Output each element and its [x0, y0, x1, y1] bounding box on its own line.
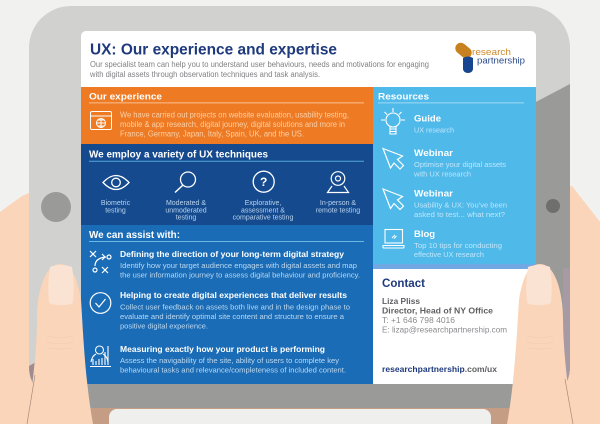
- experience text: mobile & app research, digital journey, digital solutions and more in: [120, 120, 345, 129]
- panel: assist: [81, 225, 373, 384]
- technique labels: testing: [105, 208, 126, 214]
- contact details: T: +1 646 798 4016: [382, 316, 456, 325]
- icon: question: ?: [260, 175, 267, 189]
- resource: webinar 2: Usability & UX: You’ve been: [414, 200, 507, 210]
- item: digital experiences: [120, 290, 350, 330]
- resource: blog: Top 10 tips for conducting: [414, 241, 502, 250]
- resource: webinar 1: Webinar: [414, 148, 454, 158]
- intro text: Our specialist team can help you to understand user behaviours, needs and motivations for engaging: [90, 60, 429, 69]
- icon: measuring: [90, 346, 111, 366]
- technique labels: Biometric: [101, 200, 131, 207]
- resource: webinar 2: asked to test... what next?: [414, 210, 505, 219]
- left palm: [0, 188, 40, 424]
- contact details: Liza Pliss: [382, 297, 421, 306]
- resource: webinar 1: Optimise your digital assets: [414, 160, 506, 169]
- item: digital strategy: [120, 249, 360, 280]
- technique labels: assessment &: [241, 208, 285, 214]
- panel: our experience: [81, 87, 373, 144]
- resource: blog: effective UX research: [414, 250, 484, 259]
- experience text: We have carried out projects on website evaluation, usability testing,: [120, 110, 349, 120]
- item: measuring: Assess the navigability of the site, ability of users to complete key: [120, 356, 339, 365]
- panel: resources: [373, 87, 536, 269]
- resource: webinar 1: [413, 148, 506, 178]
- technique labels: remote testing: [316, 208, 360, 214]
- panel: contact: [373, 269, 536, 384]
- right hand thumb: [507, 264, 573, 424]
- item: measuring: [120, 344, 346, 374]
- right palm: [560, 186, 600, 424]
- left hand palm edge: [0, 212, 29, 424]
- experience text: France, Germany, Japan, Italy, Spain, UK, and the US.: [120, 130, 304, 138]
- right hand palm edge: [570, 212, 600, 424]
- logo: [453, 41, 525, 73]
- icon: eye: [103, 176, 129, 190]
- resource: webinar 2: [414, 188, 507, 219]
- camera left: [41, 192, 71, 222]
- heading: contact: Contact: [382, 278, 425, 290]
- contact details: Director, Head of NY Office: [382, 306, 494, 316]
- icon: strategy: [90, 251, 111, 273]
- resource: blog: [414, 229, 502, 259]
- resource: webinar 1: with UX research: [413, 170, 471, 178]
- heading: our experience: Our experience: [89, 92, 162, 102]
- logo: partnership: [477, 56, 525, 66]
- icon: cursor 2: [383, 189, 404, 210]
- item: digital experiences: Collect user feedback on assets both live and in the design phase to: [120, 302, 350, 312]
- screen header panel: [81, 31, 536, 87]
- icon: laptop: [383, 230, 404, 248]
- heading: resources: Resources: [378, 92, 429, 102]
- icon: browser globe: [90, 112, 112, 130]
- palm shadow behind tablet: [85, 400, 515, 424]
- item: measuring: Measuring exactly how your product is performing: [120, 344, 325, 354]
- contact details: E: lizap@researchpartnership.com: [382, 326, 507, 334]
- contact details: [382, 297, 507, 334]
- item: digital strategy: Defining the direction of your long-term digital strategy: [120, 249, 344, 259]
- resource: guide: [414, 114, 454, 134]
- technique labels: Moderated &: [166, 200, 206, 207]
- icon: lightbulb: [381, 108, 405, 134]
- technique labels: [101, 200, 360, 222]
- title: UX: Our experience and expertise: [90, 42, 337, 58]
- item: digital strategy: Identify how your target audience engages with digital assets and map: [120, 261, 357, 270]
- resource: blog: Blog: [414, 229, 435, 239]
- technique labels: comparative testing: [233, 214, 293, 222]
- resource: webinar 2: Webinar: [414, 188, 454, 198]
- intro text: with digital assets through observation techniques and task analysis.: [89, 70, 320, 79]
- item: digital strategy: the user information journey to assess digital behaviour and proficiency.: [120, 270, 360, 280]
- technique labels: In-person &: [320, 200, 356, 207]
- heading: techniques: We employ a variety of UX techniques: [89, 150, 268, 160]
- experience text: [120, 110, 349, 138]
- website url: researchpartnership .com/ux: [382, 364, 497, 374]
- camera right: [546, 199, 560, 213]
- icon: check: [90, 293, 111, 313]
- technique labels: Explorative,: [245, 200, 281, 207]
- technique labels: testing: [176, 214, 196, 222]
- item: digital experiences: positive digital experience.: [120, 322, 208, 330]
- left hand thumb: [27, 264, 93, 424]
- icon: cursor: [383, 148, 404, 169]
- icon: webcam: [328, 172, 348, 192]
- resource: guide: Guide: [414, 114, 441, 124]
- resource: guide: UX research: [414, 126, 454, 134]
- item: digital experiences: Helping to create digital experiences that deliver results: [120, 290, 347, 300]
- intro text: [89, 60, 429, 79]
- item: digital experiences: evaluate and identify optimal site content and structure to ensure a: [120, 312, 345, 321]
- icon: question: [253, 171, 274, 192]
- item: measuring: behavioural tasks and relevance/completeness of included content.: [120, 366, 346, 374]
- icon: magnifier: [175, 172, 196, 192]
- home button: [109, 409, 491, 424]
- logo: research: [472, 47, 511, 58]
- technique labels: unmoderated: [165, 208, 207, 214]
- panel: techniques: [81, 144, 373, 225]
- heading: assist: We can assist with:: [89, 230, 180, 241]
